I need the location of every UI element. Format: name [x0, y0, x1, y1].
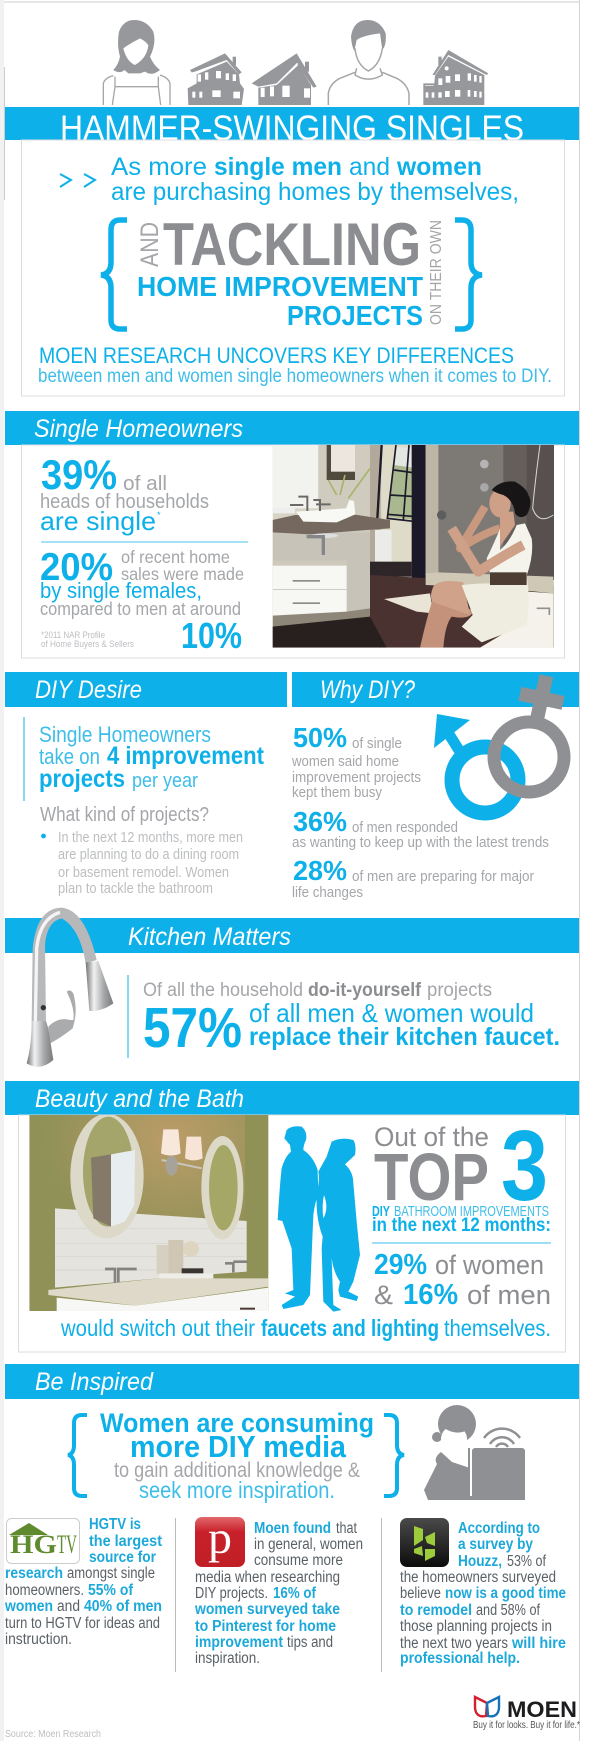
women and men stats — [374, 1249, 551, 1311]
HGTV text: 40% of men — [84, 1598, 162, 1615]
stat 57 percent: 57% — [143, 996, 242, 1060]
icon: Pinterest logo — [195, 1512, 245, 1567]
Houzz text: to remodel — [400, 1602, 472, 1619]
stat 20 percent: sales were made — [121, 564, 244, 584]
stat 50 percent: improvement projects — [292, 769, 421, 786]
icon: HGTV logo: TV — [57, 1530, 77, 1559]
bathroom improvements caption — [372, 1203, 551, 1236]
Pinterest text: to Pinterest for home — [195, 1618, 336, 1635]
stat 36 percent: 36% — [293, 806, 347, 837]
vertical words ON THEIR OWN: ON THEIR OWN — [428, 220, 445, 325]
bullet text: plan to tackle the bathroom — [58, 880, 213, 897]
panel: DIY desire text — [24, 717, 265, 897]
Houzz text: and 58% of — [476, 1602, 541, 1619]
top 3 headline — [374, 1110, 548, 1222]
icon: kitchen faucet — [27, 908, 113, 1067]
stat 20 percent: by single females, — [40, 578, 202, 603]
callout text: more DIY media — [130, 1429, 347, 1464]
Houzz text: believe — [400, 1585, 441, 1602]
stat 28 percent: life changes — [292, 884, 363, 901]
HGTV text: source for — [89, 1549, 156, 1566]
column: Pinterest — [194, 1512, 363, 1667]
icon: right brace — [384, 1415, 404, 1496]
source note: Source: Moen Research — [5, 1729, 101, 1740]
icon: HGTV logo — [6, 1518, 80, 1564]
stat 36 percent: as wanting to keep up with the latest trends — [292, 834, 549, 851]
Houzz text: According to — [458, 1520, 540, 1537]
Houzz text: the homeowners surveyed — [400, 1569, 556, 1586]
word PROJECTS: PROJECTS — [287, 300, 423, 331]
bullet text: or basement remodel. Women — [58, 864, 229, 881]
icon: Houzz logo — [400, 1518, 449, 1567]
icon: HGTV logo: HG — [10, 1530, 57, 1559]
projects per year statement: Single Homeowners — [39, 722, 211, 747]
stat 28 percent: of men are preparing for major — [352, 868, 534, 885]
stat 28 percent — [292, 855, 534, 901]
HGTV text: and — [57, 1598, 80, 1615]
callout text — [100, 1408, 374, 1503]
HGTV text: HGTV is — [89, 1516, 141, 1533]
panel: kitchen stat — [128, 975, 560, 1060]
household projects line: Of all the household — [143, 980, 303, 1001]
intro text: women — [396, 153, 482, 181]
HGTV text: the largest — [89, 1533, 162, 1550]
logo: Moen — [473, 1697, 580, 1731]
Pinterest text: women surveyed take — [194, 1601, 340, 1618]
icon: Pinterest logo: p — [208, 1512, 232, 1563]
Pinterest text: consume more — [254, 1552, 343, 1569]
bullet text — [41, 829, 243, 897]
HGTV text: research — [5, 1565, 63, 1582]
bathroom improvements caption: DIY — [372, 1203, 390, 1220]
icon: male symbol — [434, 714, 518, 813]
panel: single homeowners — [22, 445, 564, 658]
top 3 headline: TOP — [374, 1140, 489, 1215]
stat 36 percent: of men responded — [352, 819, 458, 836]
faucet replacement text: of all men & women would — [249, 998, 534, 1028]
faucets and lighting line: faucets and lighting — [261, 1315, 439, 1341]
Pinterest text: tips and — [287, 1634, 333, 1651]
household projects line: do-it-yourself — [308, 980, 422, 1001]
Houzz text: a survey by — [458, 1536, 533, 1553]
panel: why DIY stats — [291, 722, 549, 901]
title: HAMMER-SWINGING SINGLES — [60, 109, 524, 148]
Pinterest text: that — [336, 1520, 358, 1537]
icon: left brace — [101, 220, 127, 329]
heading band: Be Inspired — [5, 1364, 579, 1399]
bathroom improvements caption: BATHROOM IMPROVEMENTS — [394, 1203, 549, 1220]
stat 20 percent: of recent home — [121, 547, 230, 567]
icon: house one — [188, 53, 244, 105]
household projects line: projects — [427, 980, 492, 1001]
faucet replacement text: replace their kitchen faucet. — [249, 1023, 560, 1051]
heading band: Single Homeowners — [5, 411, 579, 445]
faucets and lighting line — [60, 1315, 551, 1341]
stat 50 percent: women said home — [291, 753, 399, 770]
callout text: Women are consuming — [100, 1408, 374, 1438]
word TACKLING: TACKLING — [163, 211, 421, 278]
stat 50 percent: of single — [352, 735, 402, 752]
projects per year statement: per year — [132, 770, 198, 792]
column: Houzz — [400, 1518, 566, 1667]
women and men stats: 29% — [374, 1249, 427, 1281]
header icons — [103, 20, 488, 105]
HGTV text: women — [4, 1598, 53, 1615]
photo: double vanity bathroom — [29, 1114, 268, 1311]
bullet text: In the next 12 months, more men — [58, 829, 243, 846]
Pinterest text: media when researching — [195, 1569, 340, 1586]
stat 39 percent: heads of households — [40, 491, 209, 513]
HGTV text — [4, 1516, 162, 1648]
Houzz text: those planning projects in — [400, 1618, 552, 1635]
callout text: to gain additional knowledge & — [114, 1459, 360, 1482]
projects per year statement: 4 improvement — [107, 742, 265, 770]
vertical word AND: AND — [136, 222, 164, 267]
Pinterest text: DIY projects. — [195, 1585, 268, 1602]
stat 20 percent: 20% — [40, 546, 113, 589]
heading band: Single Homeowners: Single Homeowners — [34, 415, 243, 443]
words HOME IMPROVEMENT: HOME IMPROVEMENT — [137, 271, 423, 302]
HGTV text: instruction. — [5, 1631, 72, 1648]
Houzz text: 53% of — [507, 1553, 547, 1570]
household projects line — [143, 980, 492, 1001]
Pinterest text: in general, women — [254, 1536, 363, 1553]
icon: right brace — [455, 220, 482, 329]
heading band: Why DIY: Why DIY? — [320, 676, 415, 704]
footnote — [41, 630, 134, 650]
Houzz text: now is a good time — [445, 1585, 566, 1602]
heading band: Kitchen Matters — [5, 918, 579, 953]
heading band: Beauty and the Bath — [5, 1081, 579, 1115]
faucets and lighting line: themselves. — [444, 1315, 551, 1341]
projects per year statement — [39, 722, 265, 793]
Pinterest text — [194, 1520, 363, 1667]
icon: Moen mark — [475, 1697, 499, 1716]
women and men stats: 16% — [403, 1279, 458, 1311]
Pinterest text: inspiration. — [195, 1650, 260, 1667]
Houzz text: professional help. — [400, 1650, 520, 1667]
intro text — [111, 153, 519, 206]
stat 50 percent — [291, 722, 421, 801]
intro text: As more — [111, 153, 207, 181]
icon: left brace — [68, 1415, 87, 1496]
stat 39 percent: * — [157, 510, 161, 520]
subheading: What kind of projects? — [40, 804, 209, 826]
heading band: DIY Desire — [5, 672, 287, 707]
icon: woman figure — [103, 20, 170, 105]
stat 39 percent — [40, 451, 209, 536]
Pinterest text: improvement — [195, 1634, 283, 1651]
Houzz text: the next two years — [400, 1635, 508, 1652]
projects per year statement: projects — [39, 765, 125, 793]
heading band: Why DIY — [292, 672, 579, 707]
women and men stats: & — [374, 1280, 393, 1310]
Houzz text: Houzz, — [458, 1553, 502, 1570]
stat 39 percent: 39% — [41, 451, 117, 498]
column: HGTV — [4, 1516, 162, 1648]
panel: intro — [22, 140, 564, 396]
stat 50 percent: kept them busy — [292, 784, 382, 801]
stat 36 percent — [292, 806, 549, 851]
photo: woman in bathroom — [273, 445, 554, 648]
Houzz text: will hire — [511, 1635, 566, 1652]
intro text: are purchasing homes by themselves, — [111, 178, 519, 206]
Pinterest text: Moen found — [254, 1520, 331, 1537]
HGTV text: homeowners. — [5, 1582, 84, 1599]
stat 39 percent: of all — [123, 473, 167, 495]
stat 50 percent: 50% — [293, 722, 347, 753]
icon: house three — [423, 50, 488, 105]
panel: media callout — [68, 1405, 525, 1503]
stat 39 percent: are single — [40, 506, 156, 536]
heading band: Kitchen Matters: Kitchen Matters — [128, 923, 291, 951]
bathroom improvements caption: in the next 12 months: — [372, 1215, 551, 1236]
icon: house two — [252, 53, 317, 105]
HGTV text: turn to HGTV for ideas and — [5, 1615, 160, 1632]
research subline: between men and women single homeowners when it comes to DIY. — [38, 366, 552, 387]
icon: double chevrons — [60, 174, 95, 187]
HGTV text: 55% of — [88, 1582, 134, 1599]
HGTV text: amongst single — [67, 1565, 155, 1582]
Houzz text — [400, 1520, 566, 1667]
intro text: single men — [214, 153, 342, 181]
stat 28 percent: 28% — [293, 855, 347, 886]
stat 20 percent: 10% — [181, 615, 242, 656]
research headline: MOEN RESEARCH UNCOVERS KEY DIFFERENCES — [39, 343, 514, 368]
heading band: Be Inspired: Be Inspired — [35, 1368, 154, 1396]
icon: female symbol — [494, 671, 568, 792]
top 3 headline: Out of the — [374, 1122, 489, 1152]
projects per year statement: take on — [39, 744, 100, 769]
top 3 headline: 3 — [501, 1110, 548, 1222]
icon: woman with laptop — [424, 1405, 525, 1500]
heading band: Beauty and the Bath: Beauty and the Bath — [35, 1085, 244, 1113]
icon: man figure — [328, 20, 409, 105]
heading band: DIY Desire: DIY Desire — [35, 676, 142, 704]
Pinterest text: 16% of — [273, 1585, 317, 1602]
women and men stats: of women — [435, 1250, 544, 1280]
footnote: *2011 NAR Profile — [41, 630, 105, 641]
faucets and lighting line: would switch out their — [60, 1315, 255, 1341]
bullet text: are planning to do a dining room — [58, 846, 239, 863]
footnote: of Home Buyers & Sellers — [41, 639, 134, 650]
title band — [5, 107, 579, 148]
women and men stats: of men — [467, 1280, 551, 1310]
icon: man and woman silhouettes — [278, 1126, 360, 1312]
panel: beauty and the bath — [18, 1110, 566, 1352]
stat 20 percent: compared to men at around — [40, 599, 241, 619]
intro text: and — [349, 153, 390, 181]
faucet replacement text — [249, 998, 560, 1051]
callout text: seek more inspiration. — [139, 1477, 335, 1503]
stat 20 percent — [40, 546, 244, 656]
logo: Moen: MOEN — [507, 1697, 577, 1722]
